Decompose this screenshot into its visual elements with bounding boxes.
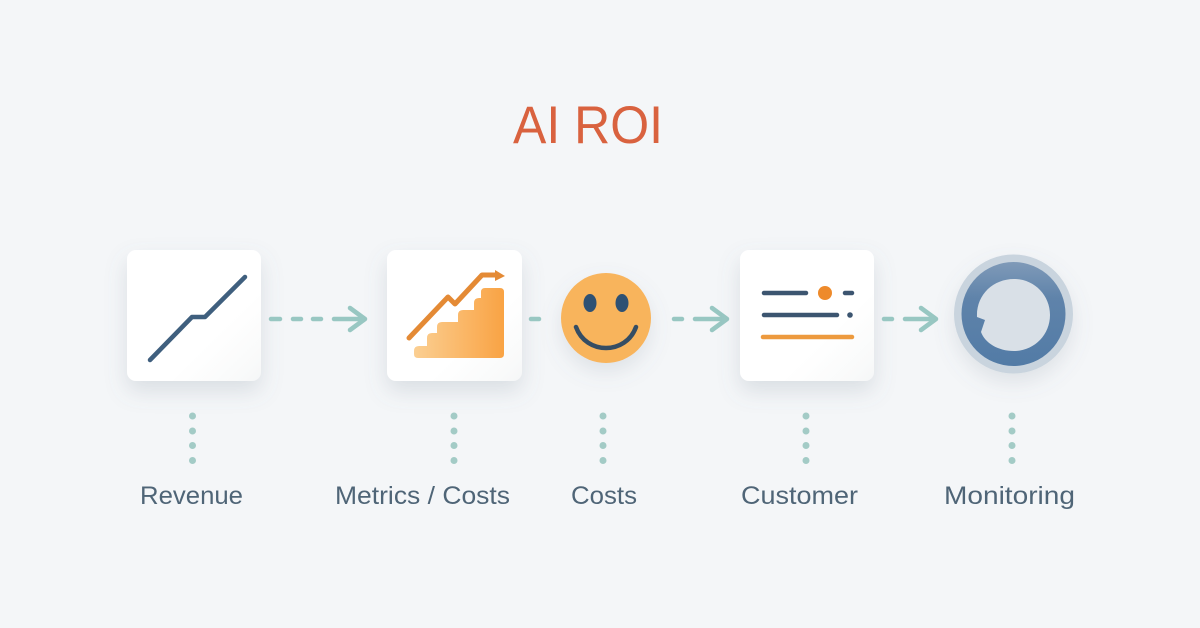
icon: rising trend arrow: [409, 270, 505, 338]
label: metrics / costs: Metrics / Costs: [335, 482, 510, 510]
panel: metrics card: [387, 250, 522, 381]
connector dots: customer: [802, 412, 810, 464]
label: revenue: Revenue: [140, 482, 243, 510]
label: costs: Costs: [571, 482, 637, 510]
label: monitoring: Monitoring: [944, 482, 1075, 510]
icon: stepped bars: [414, 288, 504, 358]
icon: monitoring dial: [954, 254, 1073, 374]
connector dots: revenue: [189, 412, 196, 464]
title: AI ROI: [513, 96, 663, 155]
icon: smiley face: [561, 273, 651, 363]
panel: customer card: [740, 250, 874, 381]
arrow: revenue to metrics: [271, 308, 365, 330]
connector dots: metrics: [450, 412, 458, 464]
connector dots: monitoring: [1008, 412, 1016, 464]
panel: revenue card: [127, 250, 261, 381]
connector: metrics to smiley: [531, 317, 539, 321]
arrow: customer to monitoring: [884, 308, 936, 330]
icon: revenue line chart: [150, 277, 245, 360]
connector dots: costs: [600, 412, 606, 464]
arrow: smiley to customer: [674, 308, 727, 330]
icon: customer list lines: [763, 286, 853, 337]
label: customer: Customer: [741, 482, 858, 510]
